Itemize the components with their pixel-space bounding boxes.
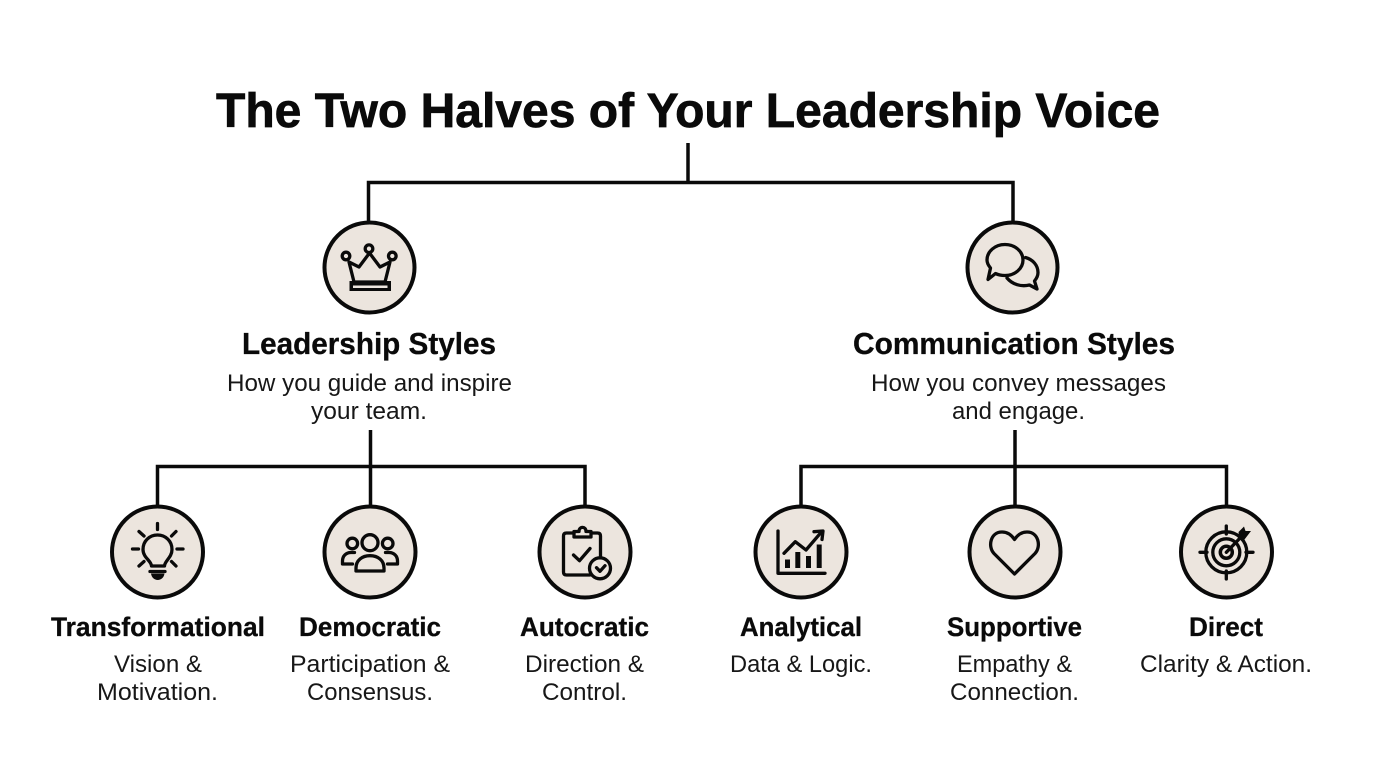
text: analytical description: Data & Logic. [730, 651, 872, 678]
label: direct: Direct [1189, 612, 1263, 642]
text: autocratic description [525, 651, 644, 706]
text: democratic description: Participation & [290, 651, 450, 678]
text: leadership description: your team. [311, 398, 427, 425]
label: analytical: Analytical [740, 612, 862, 642]
connector: leadership styles tree [158, 430, 585, 506]
item: autocratic [520, 506, 649, 706]
label: supportive: Supportive [947, 612, 1082, 642]
item: democratic [290, 506, 450, 706]
text: supportive description: Connection. [950, 679, 1079, 706]
text: supportive description [950, 651, 1079, 706]
icon: group of people [324, 506, 416, 598]
heading: leadership styles: Leadership Styles [242, 326, 496, 361]
icon: clipboard with check [540, 506, 630, 598]
text: communication description: How you convey messages [871, 370, 1166, 397]
label: democratic: Democratic [299, 612, 441, 642]
text: supportive description: Empathy & [957, 651, 1072, 678]
text: democratic description: Consensus. [307, 679, 433, 706]
text: transformational description: Motivation. [97, 679, 218, 706]
text: transformational description [97, 651, 218, 706]
icon: light bulb [112, 506, 203, 598]
label: autocratic: Autocratic [520, 612, 649, 642]
text: direct description: Clarity & Action. [1140, 651, 1312, 678]
icon: target with arrow [1181, 506, 1272, 598]
item: transformational [51, 506, 265, 706]
item: analytical [730, 506, 872, 678]
text: communication description [871, 370, 1166, 425]
heading: communication styles: Communication Styles [853, 326, 1175, 361]
connector: title to two branches [368, 143, 1013, 221]
text: communication description: and engage. [952, 398, 1085, 425]
text: autocratic description: Control. [542, 679, 627, 706]
icon: heart [970, 506, 1060, 598]
panel: leadership styles [227, 222, 512, 425]
text: autocratic description: Direction & [525, 651, 644, 678]
panel: communication styles [853, 222, 1175, 425]
title: The Two Halves of Your Leadership Voice [216, 85, 1160, 138]
icon: speech bubbles [968, 222, 1058, 312]
item: direct [1140, 506, 1312, 678]
text: democratic description [290, 651, 450, 706]
text: leadership description: How you guide and inspire [227, 370, 512, 397]
icon: growth chart [756, 506, 846, 598]
text: leadership description [227, 370, 512, 425]
label: transformational: Transformational [51, 612, 265, 642]
item: supportive [947, 506, 1082, 706]
icon: crown [324, 222, 414, 312]
connector: communication styles tree [801, 430, 1226, 506]
text: transformational description: Vision & [114, 651, 202, 678]
